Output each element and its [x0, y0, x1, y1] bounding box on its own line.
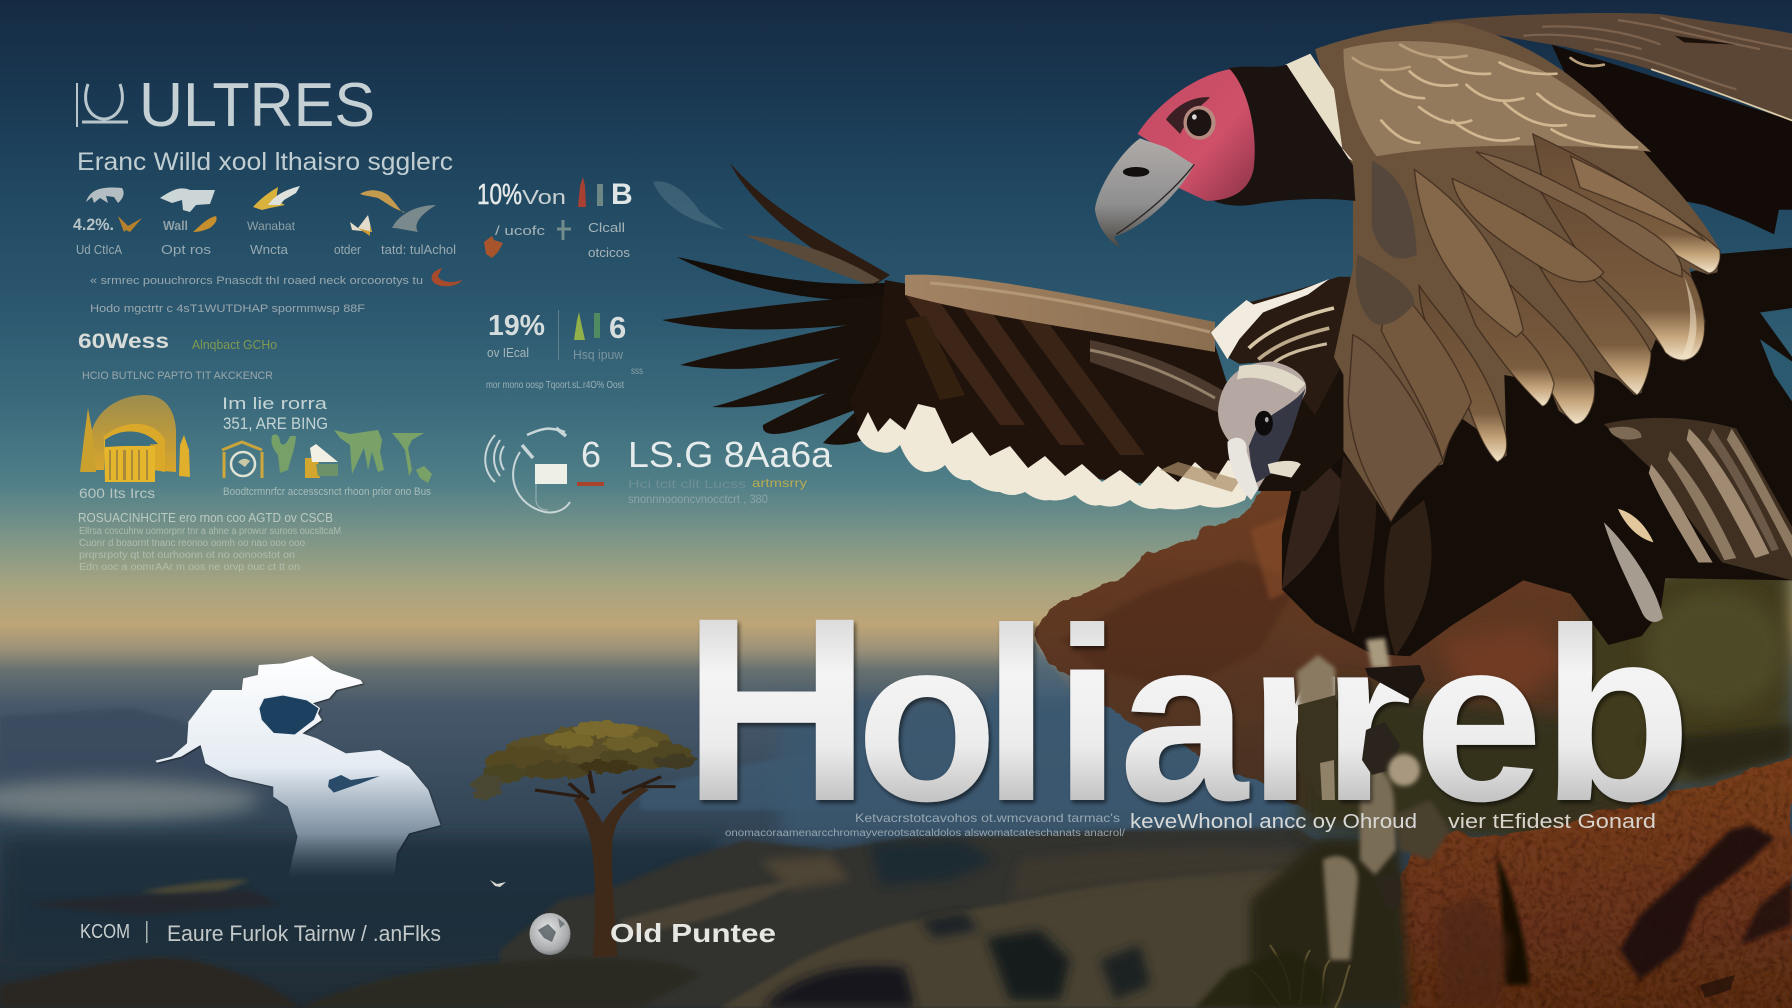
stat value: 10%: [477, 179, 522, 211]
icon: species four: [350, 190, 436, 236]
stat captions: [486, 345, 643, 391]
title ULTRES: ULTRES: [139, 71, 375, 140]
foreground rock: [1195, 757, 1792, 1008]
footer left: [80, 921, 441, 946]
vulture illustration: [662, 13, 1792, 656]
icon: tree: [392, 433, 432, 483]
stat captions: [495, 220, 631, 260]
vulture: main wing: [1285, 13, 1792, 522]
red marker: [577, 482, 604, 486]
stat labels: Wanabat: [247, 219, 296, 233]
habitat icons: [222, 430, 432, 483]
habitat heading: [222, 394, 328, 433]
stat captions: otcicos: [588, 245, 631, 260]
habitat heading: Im lie rorra: [222, 394, 328, 413]
stat labels: [73, 215, 296, 234]
Africa map: [155, 656, 440, 878]
vulture: bird legs on perch: [1323, 767, 1450, 960]
subtext small lines: Ketvacrstotcavohos ot.wmcvaond tarmac's: [855, 811, 1120, 825]
title subtext: [725, 811, 1656, 839]
footer logo: KCOM: [80, 921, 130, 943]
species data labels: [73, 215, 456, 382]
big title word: e: [1414, 591, 1543, 850]
big title word: r: [1248, 591, 1338, 850]
species names: Ud CtIcA: [76, 242, 122, 257]
footer brand name: Old Puntee: [610, 918, 776, 948]
big title word: [682, 563, 1692, 856]
block lines: Ellrsa coscuhrw uomorpnr tnr a ahne a prowur suroos oucsltcaM: [79, 526, 341, 537]
stat captions: mor mono oosp Tqoort.sL.r4O% Oost: [486, 380, 624, 391]
icon: plus: [557, 220, 571, 240]
stat captions: Clcall: [588, 220, 625, 235]
habitat text block: [78, 510, 341, 573]
stat caption: Alnqbact GCHo: [192, 337, 277, 352]
species names: [76, 242, 456, 257]
stats column one: 10 percent: [477, 177, 633, 260]
stat unit: Von: [522, 187, 566, 209]
icon: faint ghost feather: [653, 181, 725, 230]
pink face: [1138, 69, 1255, 201]
vulture: main head: [1095, 65, 1355, 248]
habitat note: Boodtcrmnrfcr accesscsnct rhoon prior ono Bus: [223, 486, 431, 498]
block lines: [79, 526, 341, 573]
big title word: a: [1119, 591, 1250, 850]
icon: animal: [334, 430, 384, 474]
subtext small lines: onomacoraamenarcchromayverootsatcaldolos alswomatcateschanats anacrol/: [725, 828, 1125, 839]
header: logo and title: [77, 71, 453, 176]
icon: small distant bird: [490, 880, 506, 887]
icon: golden dome: [80, 395, 190, 482]
big title word: i: [1053, 577, 1122, 853]
block lines: prqrsrpoty qt tot ourhoonn ot no oonoostot on: [79, 550, 295, 561]
stats column two: 19 percent: [486, 310, 643, 391]
subtext small lines: [725, 811, 1125, 839]
block heading: ROSUACINHCITE ero rnon coo AGTD ov CSCB: [78, 510, 333, 525]
distant landscape: [0, 640, 1350, 1008]
icon: mountain: [305, 444, 338, 478]
icon: shrine: [222, 442, 262, 478]
habitat heading: 351, ARE BING: [223, 414, 328, 433]
icon: orange splash: [484, 236, 503, 258]
description lines: Hodo mgctrtr c 4sT1WUTDHAP spormmwsp 88F: [90, 303, 365, 315]
stat captions: sss: [631, 366, 643, 377]
subtitle: Eranc Willd xool lthaisro sgglerc: [77, 148, 453, 176]
stats block three: [485, 428, 833, 513]
block lines: Edn ooc a oomrAAr m oos ne orvp ouc ct tt on: [79, 562, 300, 573]
stat: 60 Wess: 60Wess: [78, 330, 169, 353]
footer divider: [146, 921, 148, 943]
stat captions: ov IEcal: [487, 345, 529, 360]
stat captions: / ucofc: [495, 223, 546, 238]
map small lake: [328, 775, 380, 793]
species names: Wncta: [250, 242, 289, 257]
vulture: leg feathers over title: [1297, 638, 1425, 800]
footer text: Eaure Furlok Tairnw / .anFlks: [167, 921, 441, 946]
icon: signal gauge: [485, 428, 570, 513]
tree canopy: [472, 721, 696, 800]
stat captions: [628, 476, 807, 506]
stat captions: Hci tcit clit Lucss: [628, 477, 746, 491]
chart bars: [578, 177, 603, 207]
icon: orange arc: [432, 268, 462, 286]
big title word: l: [982, 577, 1051, 853]
species names: otder: [334, 242, 362, 257]
vulture: rear dark plumage: [1282, 45, 1792, 656]
stat number six: 6: [581, 434, 601, 475]
stat captions: snonnnoooncvnocctcrt , 380: [628, 492, 768, 506]
habitat caption: 600 Its Ircs: [79, 485, 155, 501]
logo mark: [77, 83, 128, 127]
icon: globe: [530, 913, 570, 955]
stat detail: HCIO BUTLNC PAPTO TIT AKCKENCR: [82, 370, 273, 382]
description lines: [90, 275, 423, 315]
stat value: 19%: [488, 310, 545, 342]
icon: species three: [253, 186, 300, 210]
map dark lake: [259, 695, 319, 735]
beak: [1095, 138, 1194, 248]
stat labels: Wall: [163, 218, 188, 233]
species names: tatd: tulAchol: [381, 242, 456, 257]
stat captions: Hsq ipuw: [573, 347, 624, 362]
stat captions: artmsrry: [752, 476, 807, 490]
stat letter: B: [611, 178, 633, 211]
big title word: r: [1322, 591, 1412, 850]
tree trunk: [574, 787, 649, 957]
stat number: 6: [609, 310, 626, 345]
chart bars: [558, 310, 600, 360]
icon: species one: [86, 188, 124, 203]
icon: plant: [271, 434, 296, 473]
vulture: lower head and mantle: [1211, 277, 1358, 500]
stat labels: 4.2%.: [73, 215, 114, 234]
species names: Opt ros: [161, 242, 212, 257]
acacia tree: [472, 721, 696, 957]
map landmass: [155, 656, 440, 878]
icon: orange mark two: [193, 216, 217, 232]
icon: orange mark one: [118, 216, 142, 232]
habitat text and icons: [79, 394, 431, 501]
subtext left caption: keveWhonol ancc oy Ohroud: [1130, 811, 1417, 833]
block lines: Cuonr d boaornt tnanc reonoo oomh oo nao ooo ooo: [79, 538, 305, 549]
scrub vegetation: [1300, 550, 1792, 840]
neck: [1206, 65, 1355, 206]
subtext right caption: vier tEfidest Gonard: [1448, 811, 1656, 833]
big title word: b: [1541, 577, 1692, 853]
big title word: o: [856, 591, 998, 850]
icon: species two: [160, 188, 215, 212]
red cliff mountain: [1034, 480, 1640, 840]
big title word: H: [682, 563, 871, 856]
stat heading: LS.G 8Aa6a: [628, 434, 833, 475]
vulture: left wing: [662, 163, 1255, 509]
description lines: « srmrec pouuchrorcs Pnascdt thI roaed neck orcoorotys tu: [90, 275, 423, 287]
species icons row: [86, 186, 436, 236]
